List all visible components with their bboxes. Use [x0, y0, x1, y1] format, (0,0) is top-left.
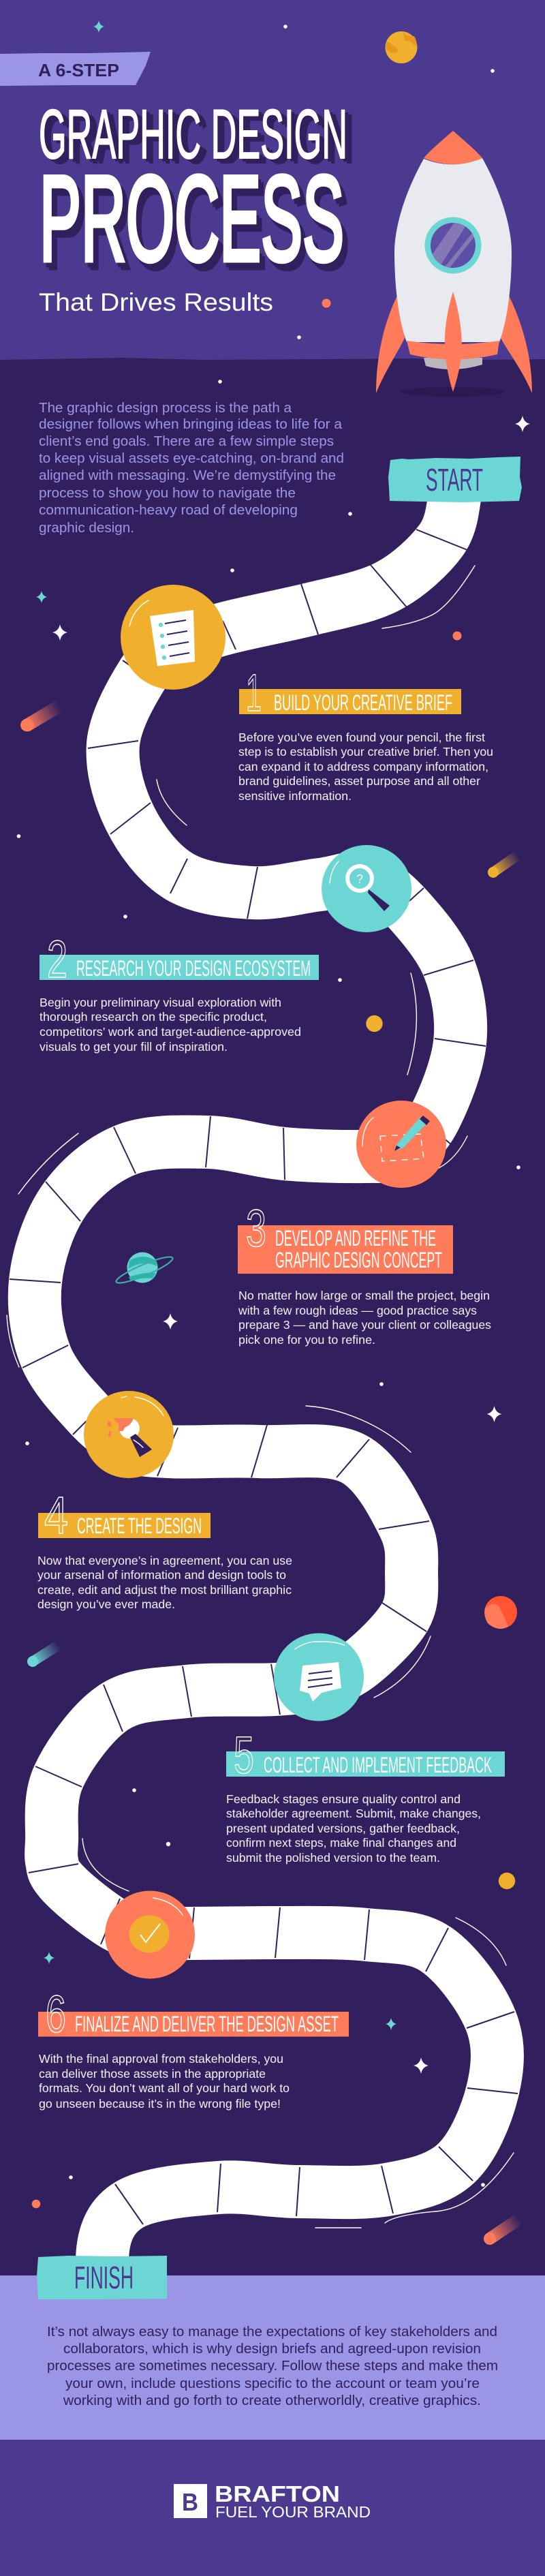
step 1 text block [238, 664, 493, 803]
label: FINISH: FINISH [74, 2260, 134, 2295]
Brafton logo [174, 2481, 371, 2521]
step 6 body: formats. You don’t want all of your hard work to [39, 2081, 290, 2095]
subtitle: That Drives Results [39, 288, 273, 316]
step 5 text block [226, 1726, 505, 1865]
step 2 heading bar: 2 [47, 930, 67, 989]
step 5 heading bar [226, 1726, 505, 1785]
step 1 body [238, 731, 493, 803]
Brafton logo: BRAFTON [215, 2481, 340, 2506]
step 3 body: with a few rough ideas — good practice says [238, 1304, 477, 1317]
step 5 body [226, 1792, 481, 1865]
step 1 heading bar [239, 664, 461, 722]
step 3 heading bar: 3 [246, 1199, 266, 1258]
step 6 body: go unseen because it’s in the wrong file type! [39, 2097, 281, 2111]
step 2 heading bar [40, 930, 319, 989]
step 5 icon: speech bubble on teal circle [274, 1633, 364, 1721]
step 3 heading bar [238, 1199, 453, 1274]
step 1 body: brand guidelines, asset purpose and all other [238, 774, 480, 788]
step 6 icon: check mark on coral circle [105, 1890, 195, 1979]
closing paragraph: your own, include questions specific to the account or team you’re [65, 2376, 480, 2391]
intro paragraph: graphic design. [39, 521, 134, 536]
step 2 body: competitors’ work and target-audience-approved [40, 1025, 301, 1039]
step 5 body: confirm next steps, make final changes and [226, 1836, 456, 1850]
icon: orange planet [386, 31, 417, 63]
step 4 body: Now that everyone’s in agreement, you can use [37, 1554, 292, 1567]
title line: PROCESS [40, 151, 349, 294]
label: START [388, 457, 522, 502]
step 3 body: prepare 3 — and have your client or colleagues [238, 1318, 491, 1332]
step 5 body: submit the polished version to the team. [226, 1851, 440, 1865]
step 2 body: visuals to get your fill of inspiration. [40, 1040, 228, 1054]
closing paragraph: processes are sometimes necessary. Follow these steps and make them [47, 2359, 498, 2374]
title line: GRAPHIC DESIGN [39, 95, 354, 178]
step 6 text block [38, 1985, 349, 2111]
step 4 body [37, 1554, 292, 1611]
icon: rocket [376, 131, 532, 397]
intro paragraph: designer follows when bringing ideas to life for a [39, 417, 343, 432]
step 5 body: present updated versions, gather feedback, [226, 1822, 460, 1835]
intro paragraph: process to show you how to navigate the [39, 486, 296, 501]
intro paragraph [39, 401, 344, 536]
step 3 text block [238, 1199, 491, 1347]
closing paragraph [47, 2325, 498, 2408]
step 3 body [238, 1289, 491, 1347]
step 2 body: thorough research on the specific product, [40, 1010, 267, 1024]
step 3 icon: pencil on coral circle [356, 1101, 446, 1188]
step 2 text block [40, 930, 319, 1054]
step 2 body: Begin your preliminary visual exploration with [40, 996, 281, 1009]
intro paragraph: aligned with messaging. We’re demystifying the [39, 468, 336, 483]
road dividers [10, 530, 518, 2224]
step 4 text block [37, 1486, 292, 1611]
step 3 body: No matter how large or small the project, begin [238, 1289, 490, 1302]
step 1 body: Before you’ve even found your pencil, the first [238, 731, 485, 744]
closing paragraph: It’s not always easy to manage the expectations of key stakeholders and [47, 2325, 497, 2340]
comet: teal [27, 1645, 59, 1667]
step 2 icon: magnifier on teal circle [322, 845, 411, 932]
step 1 icon: brief on yellow circle [121, 585, 225, 690]
step 4 body: design you’ve ever made. [37, 1597, 175, 1611]
step 1 heading bar: 1 [246, 664, 262, 722]
step 4 heading bar [38, 1486, 211, 1545]
step 2 icon: magnifier on teal circle: ? [356, 872, 363, 886]
step 5 body: Feedback stages ensure quality control and [226, 1792, 461, 1806]
footer panel [0, 2440, 545, 2576]
step 5 heading bar: 5 [234, 1726, 254, 1785]
step 3 body: pick one for you to refine. [238, 1333, 375, 1347]
step 4 heading bar: CREATE THE DESIGN [77, 1514, 202, 1538]
step 6 heading bar [38, 1985, 349, 2044]
step 1 body: step is to establish your creative brief. Then you [238, 745, 493, 758]
step 6 body: can deliver those assets in the appropriate [39, 2067, 266, 2081]
step 1 body: can expand it to address company information, [238, 760, 488, 773]
icon: teal ringed planet [114, 1253, 175, 1287]
step 2 heading bar: RESEARCH YOUR DESIGN ECOSYSTEM [76, 956, 311, 981]
step 4 heading bar: 4 [44, 1486, 68, 1545]
comet: coral lower [484, 2219, 519, 2245]
comet: coral [20, 706, 59, 732]
title: Graphic Design Process [39, 95, 354, 294]
label: START: START [426, 462, 483, 497]
step 4 body: create, edit and adjust the most brilliant graphic [37, 1583, 292, 1597]
closing paragraph: collaborators, which is why design briefs and agreed-upon revision [63, 2342, 481, 2357]
step 6 body [39, 2052, 290, 2111]
comet: yellow [488, 855, 518, 878]
winding road path [10, 494, 518, 2263]
banner: A 6-STEP [0, 52, 151, 86]
closing panel: lavender [0, 2275, 545, 2440]
step 6 heading bar: FINALIZE AND DELIVER THE DESIGN ASSET [75, 2012, 339, 2036]
header panel background [0, 0, 545, 360]
label: FINISH [37, 2256, 167, 2299]
step 4 body: your arsenal of information and design tools to [37, 1568, 286, 1582]
step 6 heading bar: 6 [46, 1985, 66, 2044]
intro paragraph: The graphic design process is the path a [39, 401, 292, 416]
intro paragraph: client’s end goals. There are a few simple steps [39, 434, 334, 449]
step 1 body: sensitive information. [238, 789, 352, 803]
banner: A 6-STEP: A 6-STEP [38, 60, 119, 80]
Brafton logo: B [182, 2488, 198, 2516]
hand-drawn motion arcs [7, 566, 514, 2228]
step 2 body [40, 996, 301, 1054]
step 5 body: stakeholder agreement. Submit, make changes, [226, 1807, 481, 1820]
closing paragraph: working with and go forth to create otherworldly, creative graphics. [63, 2393, 481, 2408]
intro paragraph: communication-heavy road of developing [39, 503, 298, 518]
intro paragraph: to keep visual assets eye-catching, on-brand and [39, 451, 344, 466]
step 4 icon: paint brush on yellow circle [84, 1391, 174, 1478]
decorative stars and dots [17, 20, 530, 2208]
step 6 body: With the final approval from stakeholders, you [39, 2052, 283, 2066]
Brafton logo: FUEL YOUR BRAND [215, 2503, 371, 2521]
icon: red planet [484, 1596, 517, 1629]
